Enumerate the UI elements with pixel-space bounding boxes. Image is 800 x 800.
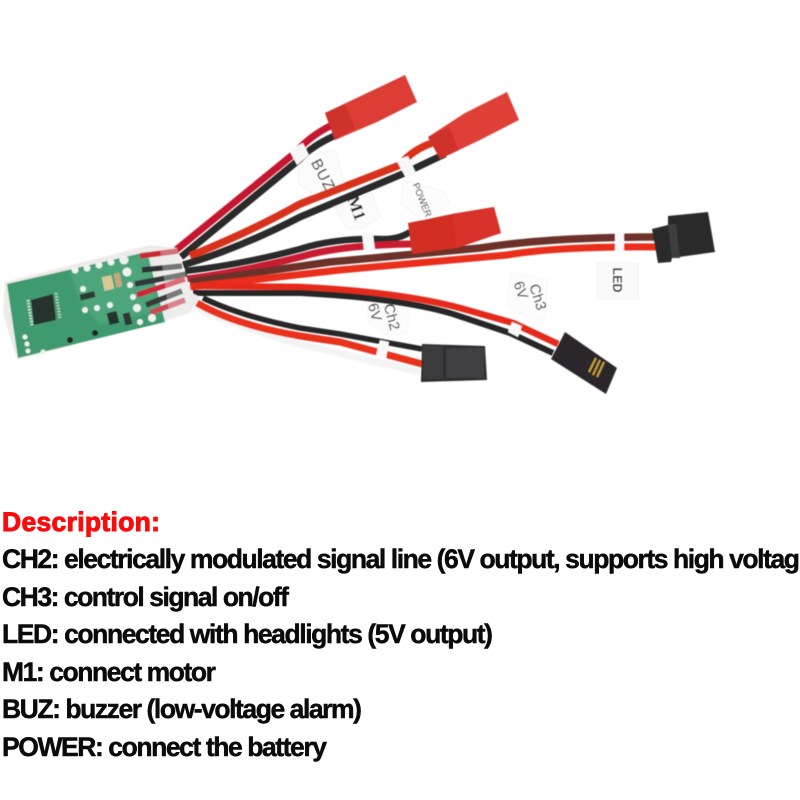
label tag: BUZ: BUZ xyxy=(307,156,338,194)
product photo: wiring harness xyxy=(3,75,715,394)
PCB light mottling xyxy=(70,254,160,325)
wire ends inside the sleeve xyxy=(135,251,187,313)
line: POWER: POWER: connect the battery xyxy=(2,732,327,762)
label tag: Ch3 6V: 6V xyxy=(510,279,530,302)
text block: description xyxy=(2,507,800,762)
circuit board in clear heat-shrink xyxy=(3,245,200,360)
label tag: Ch3 6V xyxy=(507,272,549,320)
label tag: M1: M1 xyxy=(343,193,370,223)
heading: Description: Description: xyxy=(2,507,160,537)
line: LED: LED: connected with headlights (5V output) xyxy=(2,619,493,649)
line: CH2: CH2: electrically modulated signal line (6V output, supports high voltag xyxy=(2,544,800,574)
translucent sleeve overlay on wires xyxy=(160,248,192,320)
connector: M1 xyxy=(408,207,501,254)
line: CH3: CH3: control signal on/off xyxy=(2,582,289,612)
IC chip xyxy=(28,293,60,326)
label tag: POWER xyxy=(401,180,450,222)
connector: LED xyxy=(652,212,715,263)
connector: BUZ xyxy=(325,75,417,140)
connector: POWER xyxy=(428,92,519,159)
wires: BUZ xyxy=(176,125,334,257)
line: M1: M1: connect motor xyxy=(2,657,216,687)
heat-shrink sleeve xyxy=(3,245,200,360)
label tag: BUZ xyxy=(298,150,345,196)
line: BUZ: BUZ: buzzer (low-voltage alarm) xyxy=(2,694,362,724)
SMD components xyxy=(67,273,132,343)
solder pads xyxy=(22,256,156,354)
label tag: Ch2 6V: Ch2 xyxy=(380,302,402,332)
wires: M1 xyxy=(185,232,412,279)
label tag: M1 xyxy=(334,193,381,229)
label tag: LED xyxy=(597,263,638,299)
label tag: Ch2 6V xyxy=(364,302,410,336)
label tag: LED: LED xyxy=(610,268,624,292)
wires: CH3 xyxy=(193,286,558,353)
connector: CH3 xyxy=(551,332,617,394)
wires: LED xyxy=(190,232,660,287)
wires: POWER xyxy=(183,143,445,265)
label tag: Ch3 6V: Ch3 xyxy=(525,282,549,312)
label tag: POWER: POWER xyxy=(410,181,433,219)
connector: CH2 xyxy=(421,344,487,382)
wires: CH2 xyxy=(195,298,422,372)
label tag: Ch2 6V: 6V xyxy=(364,302,384,323)
green PCB xyxy=(7,252,165,358)
